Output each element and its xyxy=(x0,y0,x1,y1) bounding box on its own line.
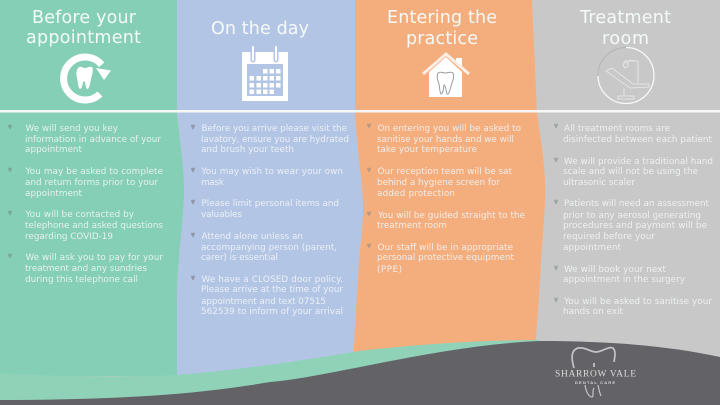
item: forms: and return forms prior to your xyxy=(25,178,158,188)
heading: treatment room: Treatment xyxy=(579,8,671,28)
panel: before your appointment xyxy=(0,0,184,376)
item: lavatory and hydration: Before you arrive please visit the xyxy=(202,124,347,134)
item: hygiene screen: Our reception team will be sat xyxy=(378,167,513,177)
item: closed door policy: 562539 to inform of your arrival xyxy=(201,307,343,317)
item: hygiene screen: behind a hygiene screen for xyxy=(377,178,500,188)
item: hand scale: scale and will not be using the xyxy=(563,167,698,177)
item: guided to room: You will be guided straight to the xyxy=(377,211,525,221)
item: forms: You may be asked to complete xyxy=(24,167,163,177)
item: staff PPE: (PPE) xyxy=(377,265,402,275)
item: hygiene screen xyxy=(367,167,513,199)
logo tooth crown xyxy=(572,348,615,368)
item: mask: mask xyxy=(201,178,225,188)
item: assessment xyxy=(554,199,710,253)
item: mask: You may wish to wear your own xyxy=(200,167,343,177)
item: next appointment: We will book your next xyxy=(564,265,667,275)
item: key information: We will send you key xyxy=(26,124,118,134)
panel: treatment room xyxy=(532,0,720,360)
panel: on the day xyxy=(177,0,363,376)
item: lavatory and hydration: and brush your teeth xyxy=(201,145,294,155)
heading: entering the practice: practice xyxy=(406,29,478,49)
item: telephone questions: regarding COVID-19 xyxy=(25,232,113,242)
icon: calendar xyxy=(242,47,288,101)
footer wave: dark xyxy=(0,341,720,405)
item: sanitise on exit: You will be asked to sanitise your xyxy=(563,297,712,307)
heading: before your appointment xyxy=(26,8,141,48)
item: sanitise and temperature: On entering you will be asked to xyxy=(378,124,521,134)
item: mask xyxy=(191,167,343,188)
heading: treatment room xyxy=(579,8,671,49)
list: on the day xyxy=(191,124,349,317)
item: hand scale xyxy=(554,157,713,188)
item: closed door policy: appointment and text 07515 xyxy=(201,297,326,307)
item: forms xyxy=(8,167,163,199)
item: disinfected rooms xyxy=(554,124,713,145)
item: disinfected rooms: disinfected between each patient xyxy=(563,135,713,145)
item: staff PPE: Our staff will be in appropriate xyxy=(378,243,513,253)
item: personal items xyxy=(191,199,339,220)
heading: before your appointment: Before your xyxy=(32,8,137,28)
icon: tooth in circular arrow xyxy=(64,57,111,100)
heading: entering the practice xyxy=(387,8,497,49)
heading: entering the practice: Entering the xyxy=(387,8,497,28)
item: staff PPE xyxy=(367,243,515,275)
item: assessment: Patients will need an assessment xyxy=(564,199,710,209)
logo name: SHARROW VALE xyxy=(555,370,636,380)
item: hand scale: ultrasonic scaler xyxy=(563,178,635,188)
footer wave: green band xyxy=(0,340,540,405)
item: hygiene screen: added protection xyxy=(377,189,455,199)
list: entering the practice xyxy=(367,124,525,275)
item: guided to room xyxy=(367,211,525,231)
item: sanitise on exit xyxy=(554,297,712,317)
item: personal items: valuables xyxy=(201,210,242,220)
logo tagline: DENTAL CARE xyxy=(575,380,615,385)
item: sanitise and temperature: sanitise your hands and we will xyxy=(377,135,514,145)
item: closed door policy: Please arrive at the time of your xyxy=(201,285,343,295)
icon: dental chair xyxy=(598,48,654,104)
heading: treatment room: room xyxy=(602,29,649,49)
item: hand scale: We will provide a traditional hand xyxy=(564,157,713,167)
item: assessment: prior to any aerosol generating xyxy=(563,211,701,221)
heading: on the day: On the day xyxy=(211,19,309,39)
item: sanitise and temperature: take your temperature xyxy=(377,145,477,155)
item: lavatory and hydration xyxy=(191,124,349,155)
item: payment xyxy=(8,253,163,285)
item: sanitise and temperature xyxy=(367,124,521,155)
list: treatment room xyxy=(554,124,713,317)
item: telephone questions xyxy=(8,210,163,242)
item: next appointment xyxy=(554,265,685,285)
item: key information: information in advance of your xyxy=(25,135,161,145)
item: attend alone xyxy=(191,232,337,263)
item: guided to room: treatment room xyxy=(377,221,447,231)
item: key information: appointment xyxy=(25,145,83,155)
item: payment: We will ask you to pay for your xyxy=(26,253,163,263)
item: closed door policy: We have a CLOSED door policy. xyxy=(202,275,343,285)
item: assessment: required before your xyxy=(563,232,655,242)
item: disinfected rooms: All treatment rooms are xyxy=(564,124,670,134)
list: before your appointment xyxy=(8,124,163,285)
item: payment: during this telephone call xyxy=(25,275,138,285)
item: personal items: Please limit personal items and xyxy=(202,199,339,209)
item: key information xyxy=(8,124,161,155)
item: closed door policy xyxy=(191,275,343,317)
item: lavatory and hydration: lavatory, ensure you are hydrated xyxy=(201,135,349,145)
item: attend alone: carer) is essential xyxy=(201,253,278,263)
item: assessment: procedures and payment will be xyxy=(563,221,707,231)
logo tooth roots xyxy=(585,385,601,397)
item: telephone questions: You will be contacted by xyxy=(24,210,134,220)
icon: house with tooth xyxy=(423,54,469,97)
logo: Sharrow Vale Dental Care xyxy=(555,348,636,397)
heading: before your appointment: appointment xyxy=(26,28,141,48)
item: payment: treatment and any sundries xyxy=(25,264,147,274)
item: sanitise on exit: hands on exit xyxy=(563,307,624,317)
item: attend alone: Attend alone unless an xyxy=(202,232,303,242)
item: forms: appointment xyxy=(25,189,83,199)
item: staff PPE: personal protective equipment xyxy=(377,253,515,263)
panel: entering the practice xyxy=(354,0,545,360)
item: attend alone: accompanying person (parent, xyxy=(201,243,337,253)
item: next appointment: appointment in the surgery xyxy=(563,275,685,285)
item: telephone questions: telephone and asked questions xyxy=(25,221,163,231)
item: assessment: appointment xyxy=(563,243,622,253)
divider line xyxy=(0,110,720,112)
